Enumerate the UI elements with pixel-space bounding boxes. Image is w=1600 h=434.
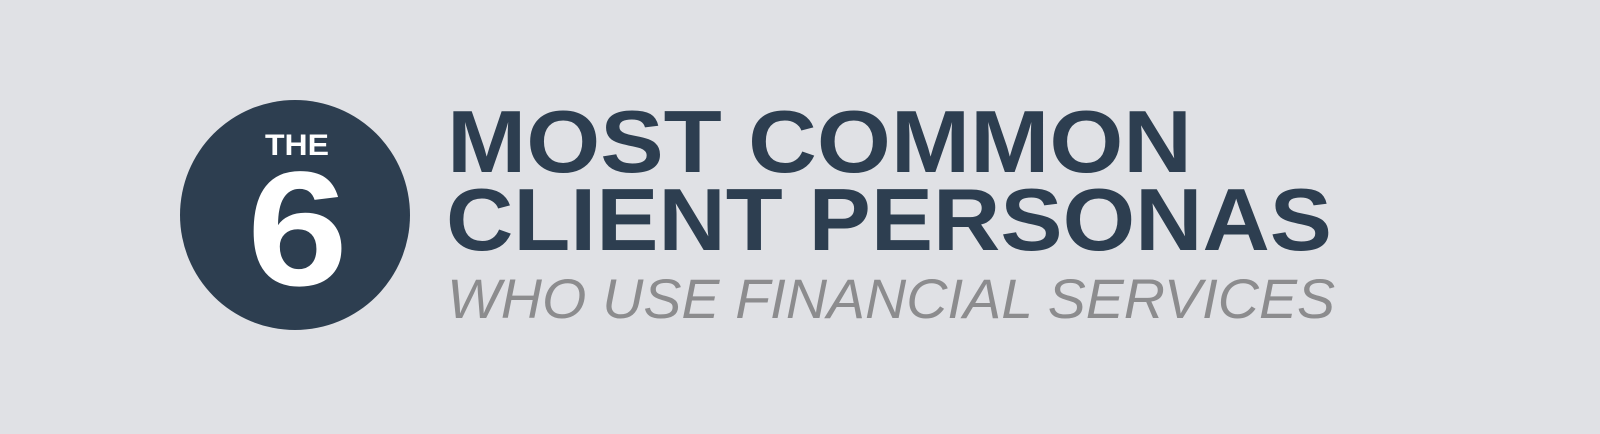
subtitle: WHO USE FINANCIAL SERVICES — [447, 267, 1335, 330]
title — [446, 92, 1332, 269]
title line 1: MOST COMMON — [447, 92, 1192, 191]
badge text: THE: THE — [265, 129, 329, 162]
badge: the 6 circle — [180, 100, 410, 330]
title line 2: CLIENT PERSONAS — [446, 170, 1332, 269]
badge number: 6: 6 — [247, 137, 348, 320]
